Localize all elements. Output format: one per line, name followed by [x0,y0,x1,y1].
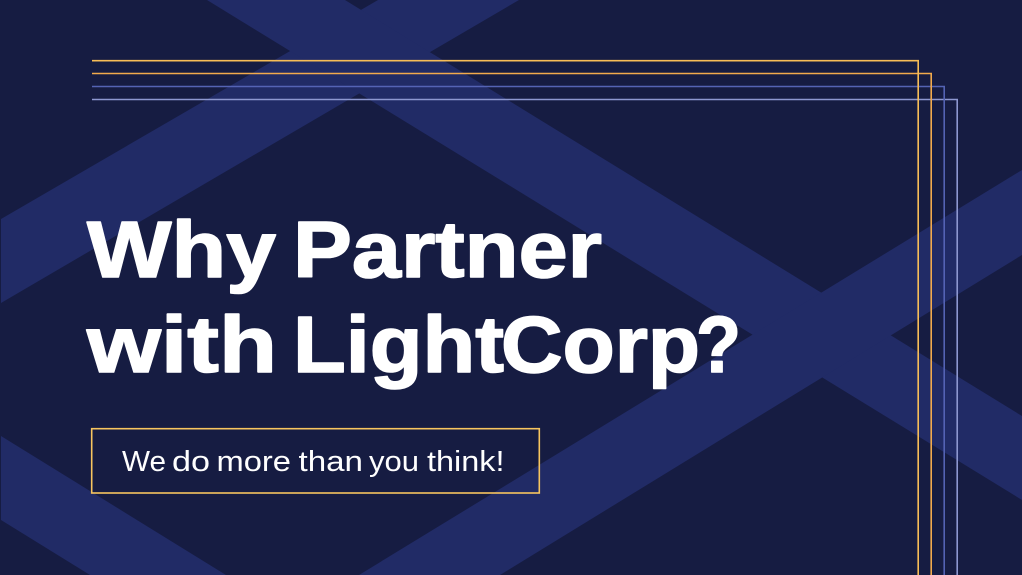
title: Light [293,300,504,389]
subtitle text: think! [427,446,504,478]
subtitle text: than [298,446,363,478]
decorative frame lines [92,61,957,575]
subtitle text [122,446,504,478]
title: Why [87,205,277,294]
title: with [86,300,277,389]
subtitle text: you [369,446,419,478]
title: Partner [293,205,602,294]
subtitle text: more [216,446,291,478]
title: ? [696,300,741,389]
subtitle border [92,429,539,493]
title: Corp [501,300,700,389]
title [86,205,741,389]
subtitle text: We [122,446,166,478]
subtitle text: do [172,446,210,478]
subtitle box [92,429,539,493]
